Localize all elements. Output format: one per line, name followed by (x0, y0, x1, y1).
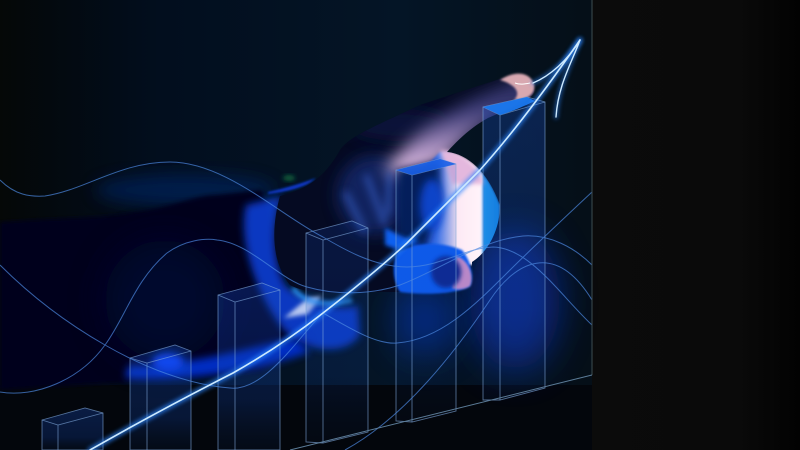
thumb (394, 244, 472, 294)
curled fingers with white and cyan reflection (412, 152, 500, 265)
bar 4 (306, 221, 368, 443)
bar 6 (483, 97, 545, 400)
sleeve of the arm (0, 190, 320, 390)
wrist cuff, blue band around the hand (244, 196, 360, 349)
thumbnail (431, 256, 461, 288)
bright patch at base of fingers (385, 228, 420, 250)
streaks across the knuckles (345, 172, 390, 232)
lit backdrop above the sleeve (95, 174, 275, 206)
wavy trend lines (0, 162, 592, 450)
bar 1 (42, 408, 103, 450)
glowing rising arrow (90, 40, 580, 450)
bar 2 (130, 345, 191, 450)
bar 3 (218, 283, 280, 450)
blue glow band under the sleeve (125, 230, 560, 379)
fingertip highlight (500, 74, 534, 100)
glass panel frame (290, 0, 592, 450)
bar 5 (396, 159, 456, 422)
soft modelling on the back of the hand (337, 155, 413, 235)
bar chart (42, 97, 545, 450)
small green and blue highlights at the wrist (268, 175, 316, 194)
hand with pointing finger (274, 72, 536, 296)
lit underside of index finger (385, 72, 534, 175)
